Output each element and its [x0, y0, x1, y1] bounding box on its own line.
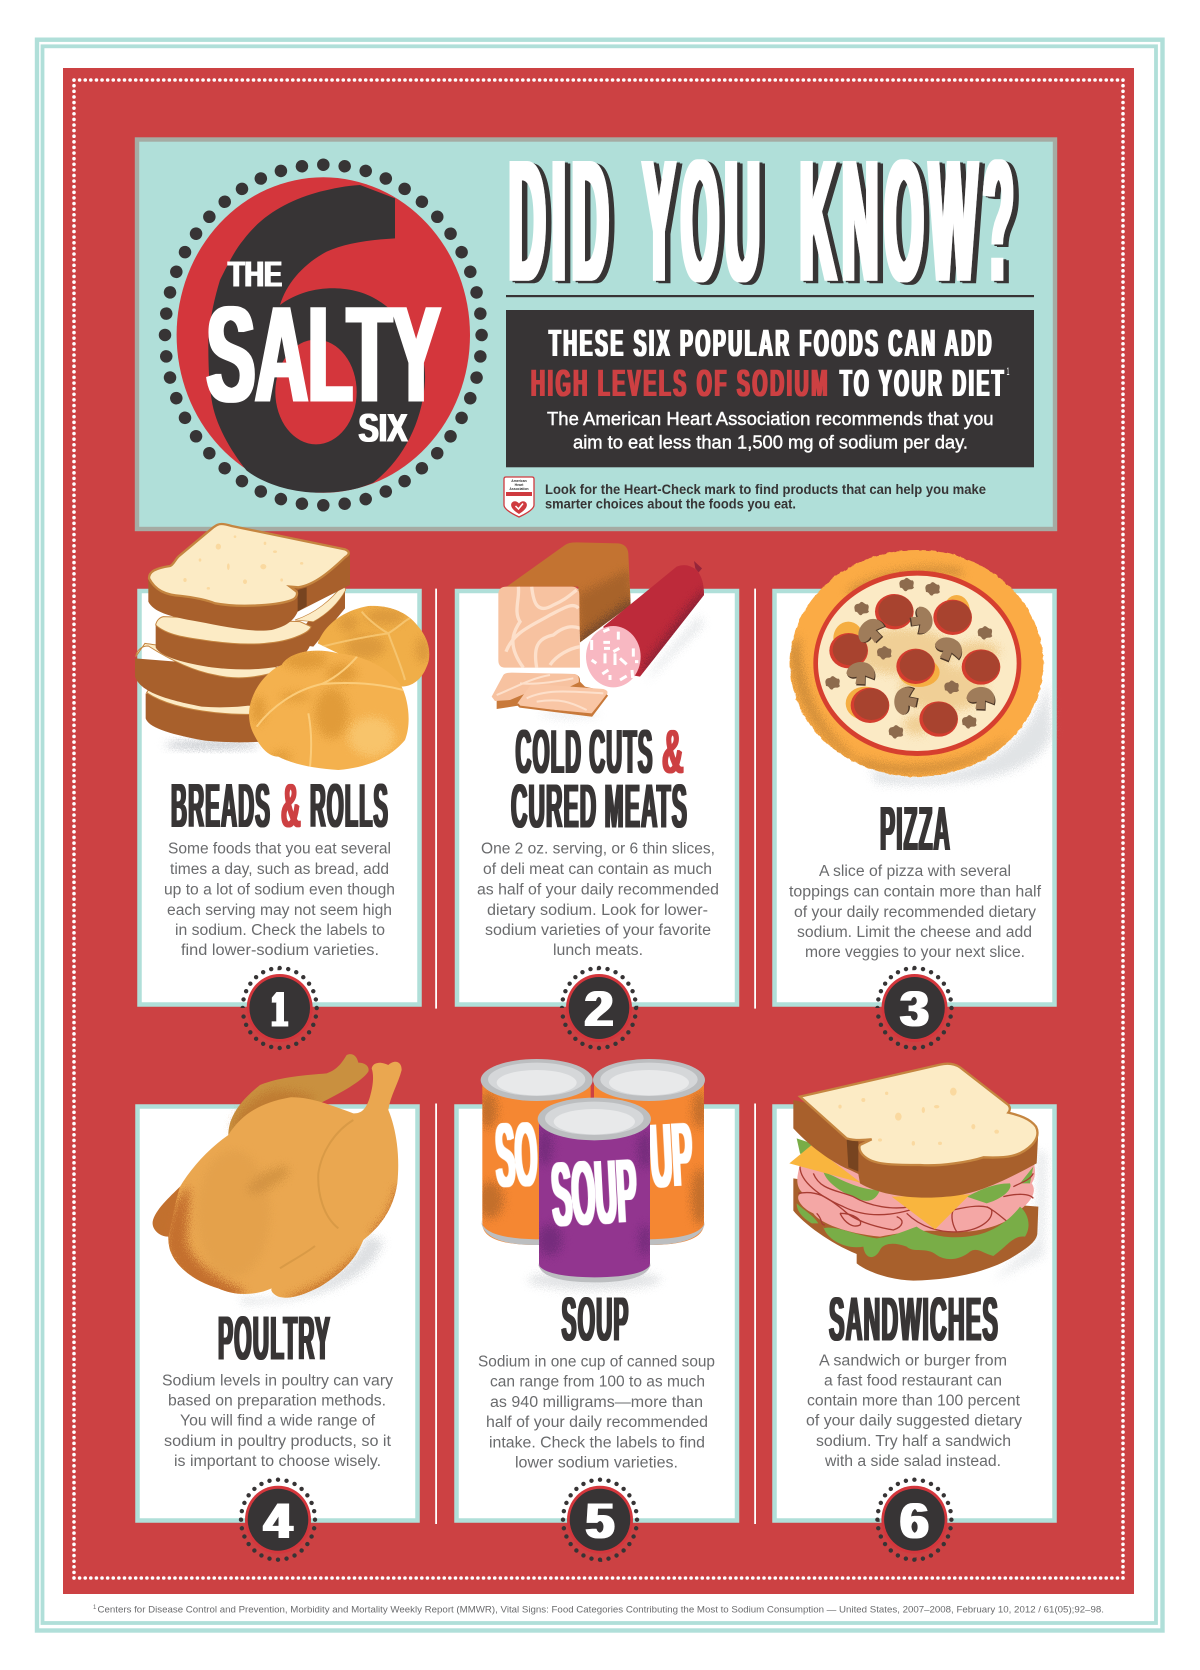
can: front purple	[538, 1098, 652, 1282]
panel: Soup	[456, 1059, 737, 1560]
text: Breads & Rolls description: times a day, such as bread, add	[170, 861, 389, 878]
text: Breads & Rolls description: each serving may not seem high	[167, 902, 392, 919]
illustration: sandwich	[789, 1064, 1047, 1281]
text: Soup description	[478, 1354, 715, 1472]
text: Poultry description: is important to choose wisely.	[174, 1453, 381, 1470]
white dotted inner border	[74, 80, 1123, 1578]
panel: Soup: SOUP	[562, 1286, 630, 1354]
text: Poultry description	[162, 1372, 393, 1470]
divider	[435, 1104, 437, 1524]
text: Sandwiches description: of your daily suggested dietary	[806, 1413, 1022, 1430]
text: Cold Cuts description: lunch meats.	[553, 942, 643, 959]
text: Breads & Rolls description: in sodium. Check the labels to	[175, 922, 385, 939]
panel: Breads & Rolls	[135, 524, 435, 1048]
number badge 3: 3	[900, 981, 928, 1037]
divider	[435, 589, 437, 1009]
text: Sandwiches description: a fast food restaurant can	[824, 1372, 1002, 1390]
number badge 4	[241, 1480, 315, 1560]
icon: Heart-Check mark: Association	[509, 487, 529, 491]
rule under title	[506, 295, 1034, 297]
panel: Soup: UP	[647, 1104, 695, 1207]
number badge 6: 6	[900, 1493, 928, 1549]
panel: Pizza: PIZZA	[880, 795, 951, 864]
panel: Breads & Rolls: ROLLS	[310, 772, 389, 841]
heading: Cold Cuts & Cured Meats	[511, 718, 688, 842]
callout: dark sodium box: The American Heart Association recommends that you	[547, 409, 994, 429]
text: Pizza description: A slice of pizza with several	[819, 863, 1011, 880]
text: Soup description: Sodium in one cup of canned soup	[478, 1354, 715, 1371]
number badge 1: 1	[272, 982, 287, 1038]
icon: Heart-Check mark: Heart	[515, 483, 524, 487]
text: Sandwiches description: A sandwich or burger from	[819, 1352, 1007, 1369]
text: Cold Cuts description: dietary sodium. Look for lower-	[487, 902, 708, 919]
heading: Breads & Rolls: &	[281, 772, 302, 841]
panel: Poultry	[138, 1054, 418, 1560]
text: Cold Cuts description: of deli meat can contain as much	[483, 861, 712, 878]
title: Did You Know?: DID	[509, 123, 615, 318]
panel: Pizza	[774, 550, 1054, 1048]
text: Soup description: intake. Check the labels to find	[489, 1434, 705, 1451]
text: Sandwiches description	[806, 1352, 1022, 1470]
panel: Cold Cuts & Cured Meats: COLD CUTS	[516, 718, 654, 787]
text: Sandwiches description: sodium. Try half a sandwich	[816, 1433, 1011, 1450]
callout: dark sodium box: aim to eat less than 1,500 mg of sodium per day.	[573, 432, 968, 452]
icon: Heart-Check mark	[504, 477, 534, 517]
text: Sandwiches description: contain more than 100 percent	[807, 1393, 1021, 1410]
divider	[754, 589, 756, 1009]
footnote: 1	[93, 1605, 97, 1611]
text: Pizza description: of your daily recommended dietary	[794, 904, 1036, 921]
text: Pizza description: toppings can contain more than half	[789, 883, 1042, 900]
illustration: roast poultry	[153, 1054, 407, 1303]
text: Cold Cuts description: One 2 oz. serving, or 6 thin slices,	[481, 841, 715, 858]
illustration: pizza	[790, 550, 1052, 784]
number badge 5	[563, 1480, 637, 1560]
callout: dark sodium box: HIGH LEVELS OF SODIUM	[531, 363, 830, 405]
text: Soup description: as 940 milligrams—more than	[490, 1394, 703, 1411]
logo: The Salty Six: SIX	[358, 406, 408, 450]
illustration: cold cuts and salami	[492, 542, 707, 718]
number badge 6	[877, 1480, 951, 1560]
text: Breads & Rolls description: Some foods that you eat several	[168, 841, 391, 858]
text: Cold Cuts description: sodium varieties of your favorite	[485, 922, 711, 939]
text: Poultry description: Sodium levels in poultry can vary	[162, 1372, 393, 1390]
text: Breads & Rolls description: up to a lot of sodium even though	[164, 882, 395, 899]
illustration: breads and rolls	[135, 524, 435, 770]
divider	[754, 1104, 756, 1524]
text: Breads & Rolls description: find lower-sodium varieties.	[181, 942, 379, 959]
text: CURED MEATS	[511, 772, 688, 842]
text: Sandwiches description: with a side salad instead.	[824, 1453, 1001, 1470]
callout: dark sodium box: 1	[1006, 366, 1010, 378]
can: back left	[477, 1059, 593, 1245]
panel: header	[137, 123, 1055, 529]
callout: dark sodium box	[506, 310, 1034, 467]
text: Cold Cuts description	[477, 841, 719, 959]
text: Poultry description: based on preparation methods.	[168, 1393, 386, 1410]
footnote: Centers for Disease Control and Prevention, Morbidity and Mortality Weekly Report (MMWR), Vital Signs: Food Categories Contributing the Most to Sodium Consumption — United States, 2007–2008, February 10, 2012 / 61(05);92–98.	[98, 1604, 1104, 1616]
can: back right	[593, 1059, 709, 1245]
number badge 2	[562, 968, 636, 1048]
number badge 5: 5	[586, 1493, 614, 1549]
illustration: soup cans	[477, 1059, 709, 1290]
callout: dark sodium box: TO YOUR DIET	[840, 363, 1006, 405]
number badge 2: 2	[585, 981, 613, 1037]
heading: Cold Cuts & Cured Meats: &	[662, 718, 685, 787]
text: Heart-Check note	[545, 482, 986, 511]
text: Poultry description: sodium in poultry products, so it	[164, 1433, 392, 1450]
number badge 3	[878, 968, 952, 1048]
panel: Sandwiches	[774, 1064, 1054, 1560]
text: Soup description: can range from 100 to as much	[490, 1374, 705, 1391]
text: Cold Cuts description: as half of your daily recommended	[477, 882, 719, 899]
text: Heart-Check note: Look for the Heart-Check mark to find products that can help you make	[545, 482, 986, 497]
text: Breads & Rolls description	[164, 841, 395, 959]
text: Soup description: lower sodium varieties.	[515, 1454, 678, 1472]
text: Pizza description: sodium. Limit the cheese and add	[797, 924, 1032, 941]
text: Poultry description: You will find a wide range of	[180, 1413, 376, 1430]
text: Pizza description: more veggies to your next slice.	[805, 944, 1025, 961]
icon: Heart-Check mark: American	[511, 479, 527, 483]
illustration: soup cans: SOUP	[549, 1141, 639, 1246]
logo: The Salty Six: THE	[228, 254, 282, 294]
title: Did You Know?: YOU	[643, 123, 766, 318]
can: back left: SO	[494, 1104, 539, 1207]
logo: The Salty Six: SALTY	[206, 278, 440, 432]
logo: The Salty Six	[165, 165, 482, 505]
text: Pizza description	[789, 863, 1042, 961]
panel: Poultry: POULTRY	[218, 1304, 331, 1373]
heading: Breads & Rolls: BREADS	[171, 772, 271, 841]
text: Heart-Check note: smarter choices about the foods you eat.	[545, 496, 796, 511]
number badge 1	[243, 968, 317, 1048]
number badge 4: 4	[264, 1493, 292, 1549]
panel: Cold Cuts & Cured Meats	[457, 542, 737, 1048]
text: Soup description: half of your daily recommended	[486, 1414, 708, 1431]
